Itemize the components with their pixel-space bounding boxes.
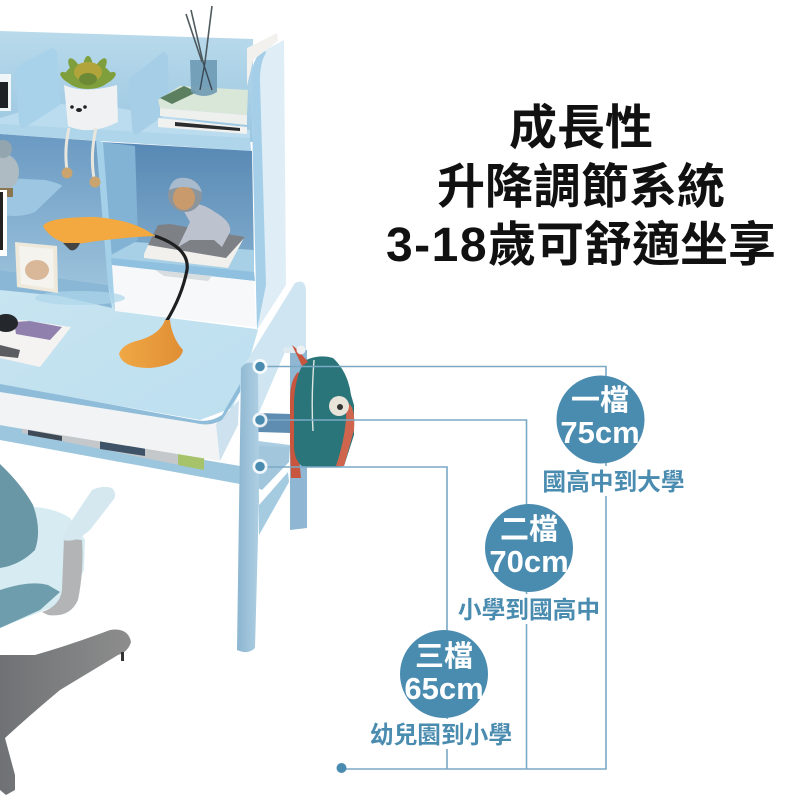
desk side frame and back leg: [240, 282, 307, 535]
magazine on desk: [0, 314, 71, 367]
level 1 badge: 75cm: 75cm: [560, 415, 640, 450]
desk top: [0, 270, 258, 420]
dark frame and bracket left: [0, 190, 7, 256]
lower hutch compartments: [0, 134, 255, 310]
desk lamp: [43, 217, 187, 368]
title: 3-18歲可舒適坐享: [386, 219, 776, 272]
books on top shelf with reed diffuser: [158, 6, 278, 134]
base line end dot: [336, 763, 346, 773]
level 1 badge: 75cm: 一檔: [571, 384, 629, 417]
hutch back and upper shelf: [0, 31, 253, 151]
succulent in bear planter: [58, 56, 118, 188]
level 1 caption: 國高中到大學: [542, 469, 685, 496]
title: 成長性: [509, 102, 653, 155]
chair: [0, 464, 131, 795]
small shelf with bear toy: [0, 140, 62, 216]
level 2 caption: 小學到國高中: [458, 597, 600, 624]
title: 升降調節系統: [437, 161, 725, 214]
picture frame: [15, 242, 58, 293]
level 2 badge: 70cm: 二檔: [500, 513, 558, 546]
level 2 badge: 70cm: [485, 504, 573, 592]
level 1 badge: 75cm: [556, 376, 644, 464]
level 3 badge: 65cm: 65cm: [404, 671, 484, 706]
level 3 badge: 65cm: [400, 630, 488, 718]
level 3 badge: 65cm: 三檔: [415, 640, 473, 673]
desk drawer and lower shelf with books: [0, 384, 240, 484]
right hutch side panel: [251, 40, 286, 330]
white drawer: [112, 265, 256, 327]
title: [386, 102, 776, 272]
backpack: [290, 345, 354, 478]
front leg: [237, 362, 259, 652]
astronaut dog figurine on books: [144, 178, 245, 268]
hutch divider panels: [15, 48, 169, 135]
desk clock: [0, 74, 11, 111]
leader lines from desk points to base: [260, 366, 606, 769]
photo: children's study desk with hutch and chair: [0, 6, 354, 795]
adjustment point markers: [252, 359, 268, 474]
level 2 badge: 70cm: 70cm: [489, 544, 569, 579]
level 3 caption: 幼兒園到小學: [370, 722, 512, 749]
